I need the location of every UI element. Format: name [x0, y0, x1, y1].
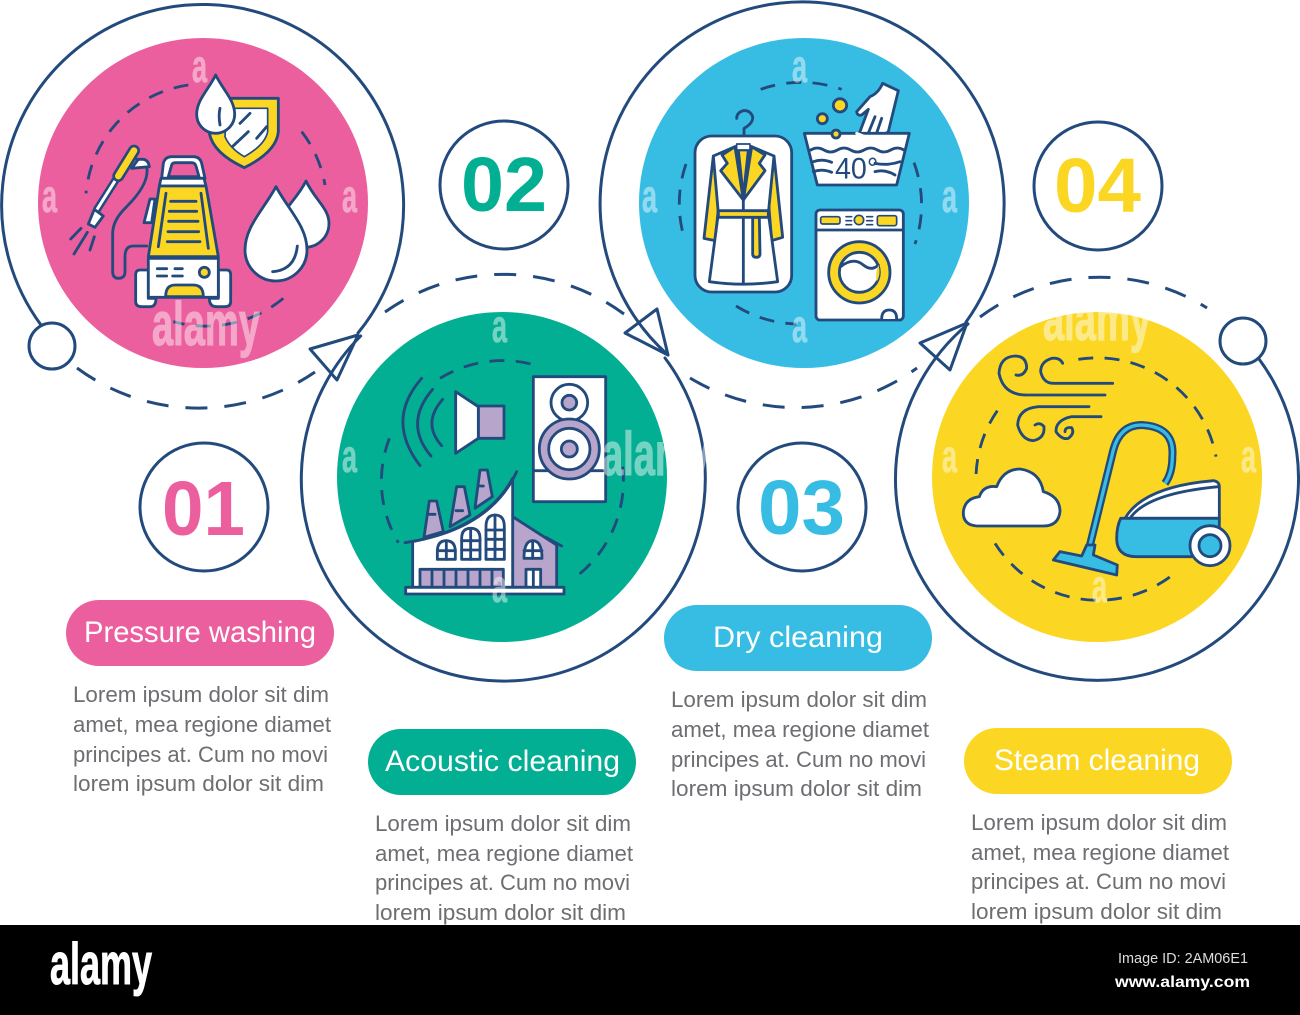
icon: speaker, loudspeaker and factory [381, 361, 623, 594]
footer bar: Image ID: 2AM06E1 [1118, 950, 1248, 967]
watermark: alamy marks over the discs: alamy [602, 420, 710, 488]
text block: step 1 description: lorem ipsum dolor sit dim [73, 771, 324, 796]
number badge 04: 04 [1054, 143, 1141, 229]
text block: step 4 description: Lorem ipsum dolor sit dim [971, 810, 1227, 835]
text block: step 2 description: principes at. Cum no movi [375, 870, 630, 895]
footer bar: alamy [50, 932, 152, 997]
watermark: alamy marks over the discs: a [792, 300, 807, 352]
heading pill: Pressure washing: Pressure washing [84, 616, 316, 649]
text block: step 4 description [971, 810, 1229, 924]
heading pill: Dry cleaning: Dry cleaning [713, 621, 883, 654]
panel: step 1 pressure washing disc [2, 4, 404, 408]
watermark: alamy marks over the discs: a [192, 40, 207, 92]
text block: step 1 description: Lorem ipsum dolor sit dim [73, 682, 329, 707]
text block: step 3 description [671, 687, 929, 801]
number badge 04 [1034, 122, 1162, 250]
text: 40 degrees on basin: 40° [835, 152, 878, 185]
text block: step 1 description: principes at. Cum no movi [73, 742, 328, 767]
heading pill: Acoustic cleaning [368, 729, 636, 795]
heading pill: Steam cleaning: Steam cleaning [994, 744, 1200, 777]
number badge 01 [140, 443, 268, 571]
text block: step 4 description: principes at. Cum no movi [971, 869, 1226, 894]
watermark: alamy marks over the discs: a [1092, 560, 1107, 612]
heading pill: Dry cleaning [664, 605, 932, 671]
panel: step 4 steam cleaning disc [895, 277, 1298, 680]
text block: step 3 description: principes at. Cum no movi [671, 747, 926, 772]
heading pill: Pressure washing [66, 600, 334, 666]
panel: step 2 acoustic cleaning disc [301, 274, 705, 681]
watermark: alamy marks over the discs: a [342, 430, 357, 482]
watermark: alamy marks over the discs: a [342, 170, 357, 222]
text block: step 1 description [73, 682, 331, 796]
watermark: alamy marks over the discs: alamy [152, 290, 260, 358]
panel: step 3 dry cleaning disc [600, 2, 1004, 408]
icon: coat in garment bag, wash basin and washing machine [679, 82, 922, 324]
text block: step 3 description: Lorem ipsum dolor sit dim [671, 687, 927, 712]
icon: pressure washer, shield and water drops [71, 75, 329, 326]
text block: step 2 description: Lorem ipsum dolor sit dim [375, 811, 631, 836]
text block: step 4 description: amet, mea regione diamet [971, 840, 1229, 865]
watermark: alamy marks over the discs [42, 40, 1256, 612]
watermark: alamy marks over the discs: a [492, 560, 507, 612]
number badge 03: 03 [758, 465, 845, 551]
text block: step 3 description: amet, mea regione diamet [671, 717, 929, 742]
text block: step 2 description: amet, mea regione diamet [375, 841, 633, 866]
watermark: alamy marks over the discs: a [642, 170, 657, 222]
number badge 01: 01 [162, 466, 245, 552]
text block: step 2 description [375, 811, 633, 925]
number badge 02: 02 [461, 142, 547, 228]
number badge 03 [738, 443, 866, 571]
watermark: alamy marks over the discs: a [1241, 430, 1256, 482]
text block: step 1 description: amet, mea regione diamet [73, 712, 331, 737]
watermark: alamy marks over the discs: a [42, 170, 57, 222]
heading pill: Acoustic cleaning: Acoustic cleaning [385, 745, 620, 778]
footer bar: www.alamy.com [1114, 974, 1250, 991]
text block: step 4 description: lorem ipsum dolor sit dim [971, 899, 1222, 924]
footer bar [0, 925, 1300, 1015]
number badge 02 [440, 121, 568, 249]
watermark: alamy marks over the discs: a [942, 170, 957, 222]
text block: step 3 description: lorem ipsum dolor sit dim [671, 776, 922, 801]
heading pill: Steam cleaning [964, 728, 1232, 794]
text block: step 2 description: lorem ipsum dolor sit dim [375, 900, 626, 925]
watermark: alamy marks over the discs: a [942, 430, 957, 482]
watermark: alamy marks over the discs: a [492, 300, 507, 352]
watermark: alamy marks over the discs: alamy [1043, 285, 1151, 353]
icon: wind, cloud and vacuum cleaner [963, 356, 1230, 600]
watermark: alamy marks over the discs: a [792, 40, 807, 92]
